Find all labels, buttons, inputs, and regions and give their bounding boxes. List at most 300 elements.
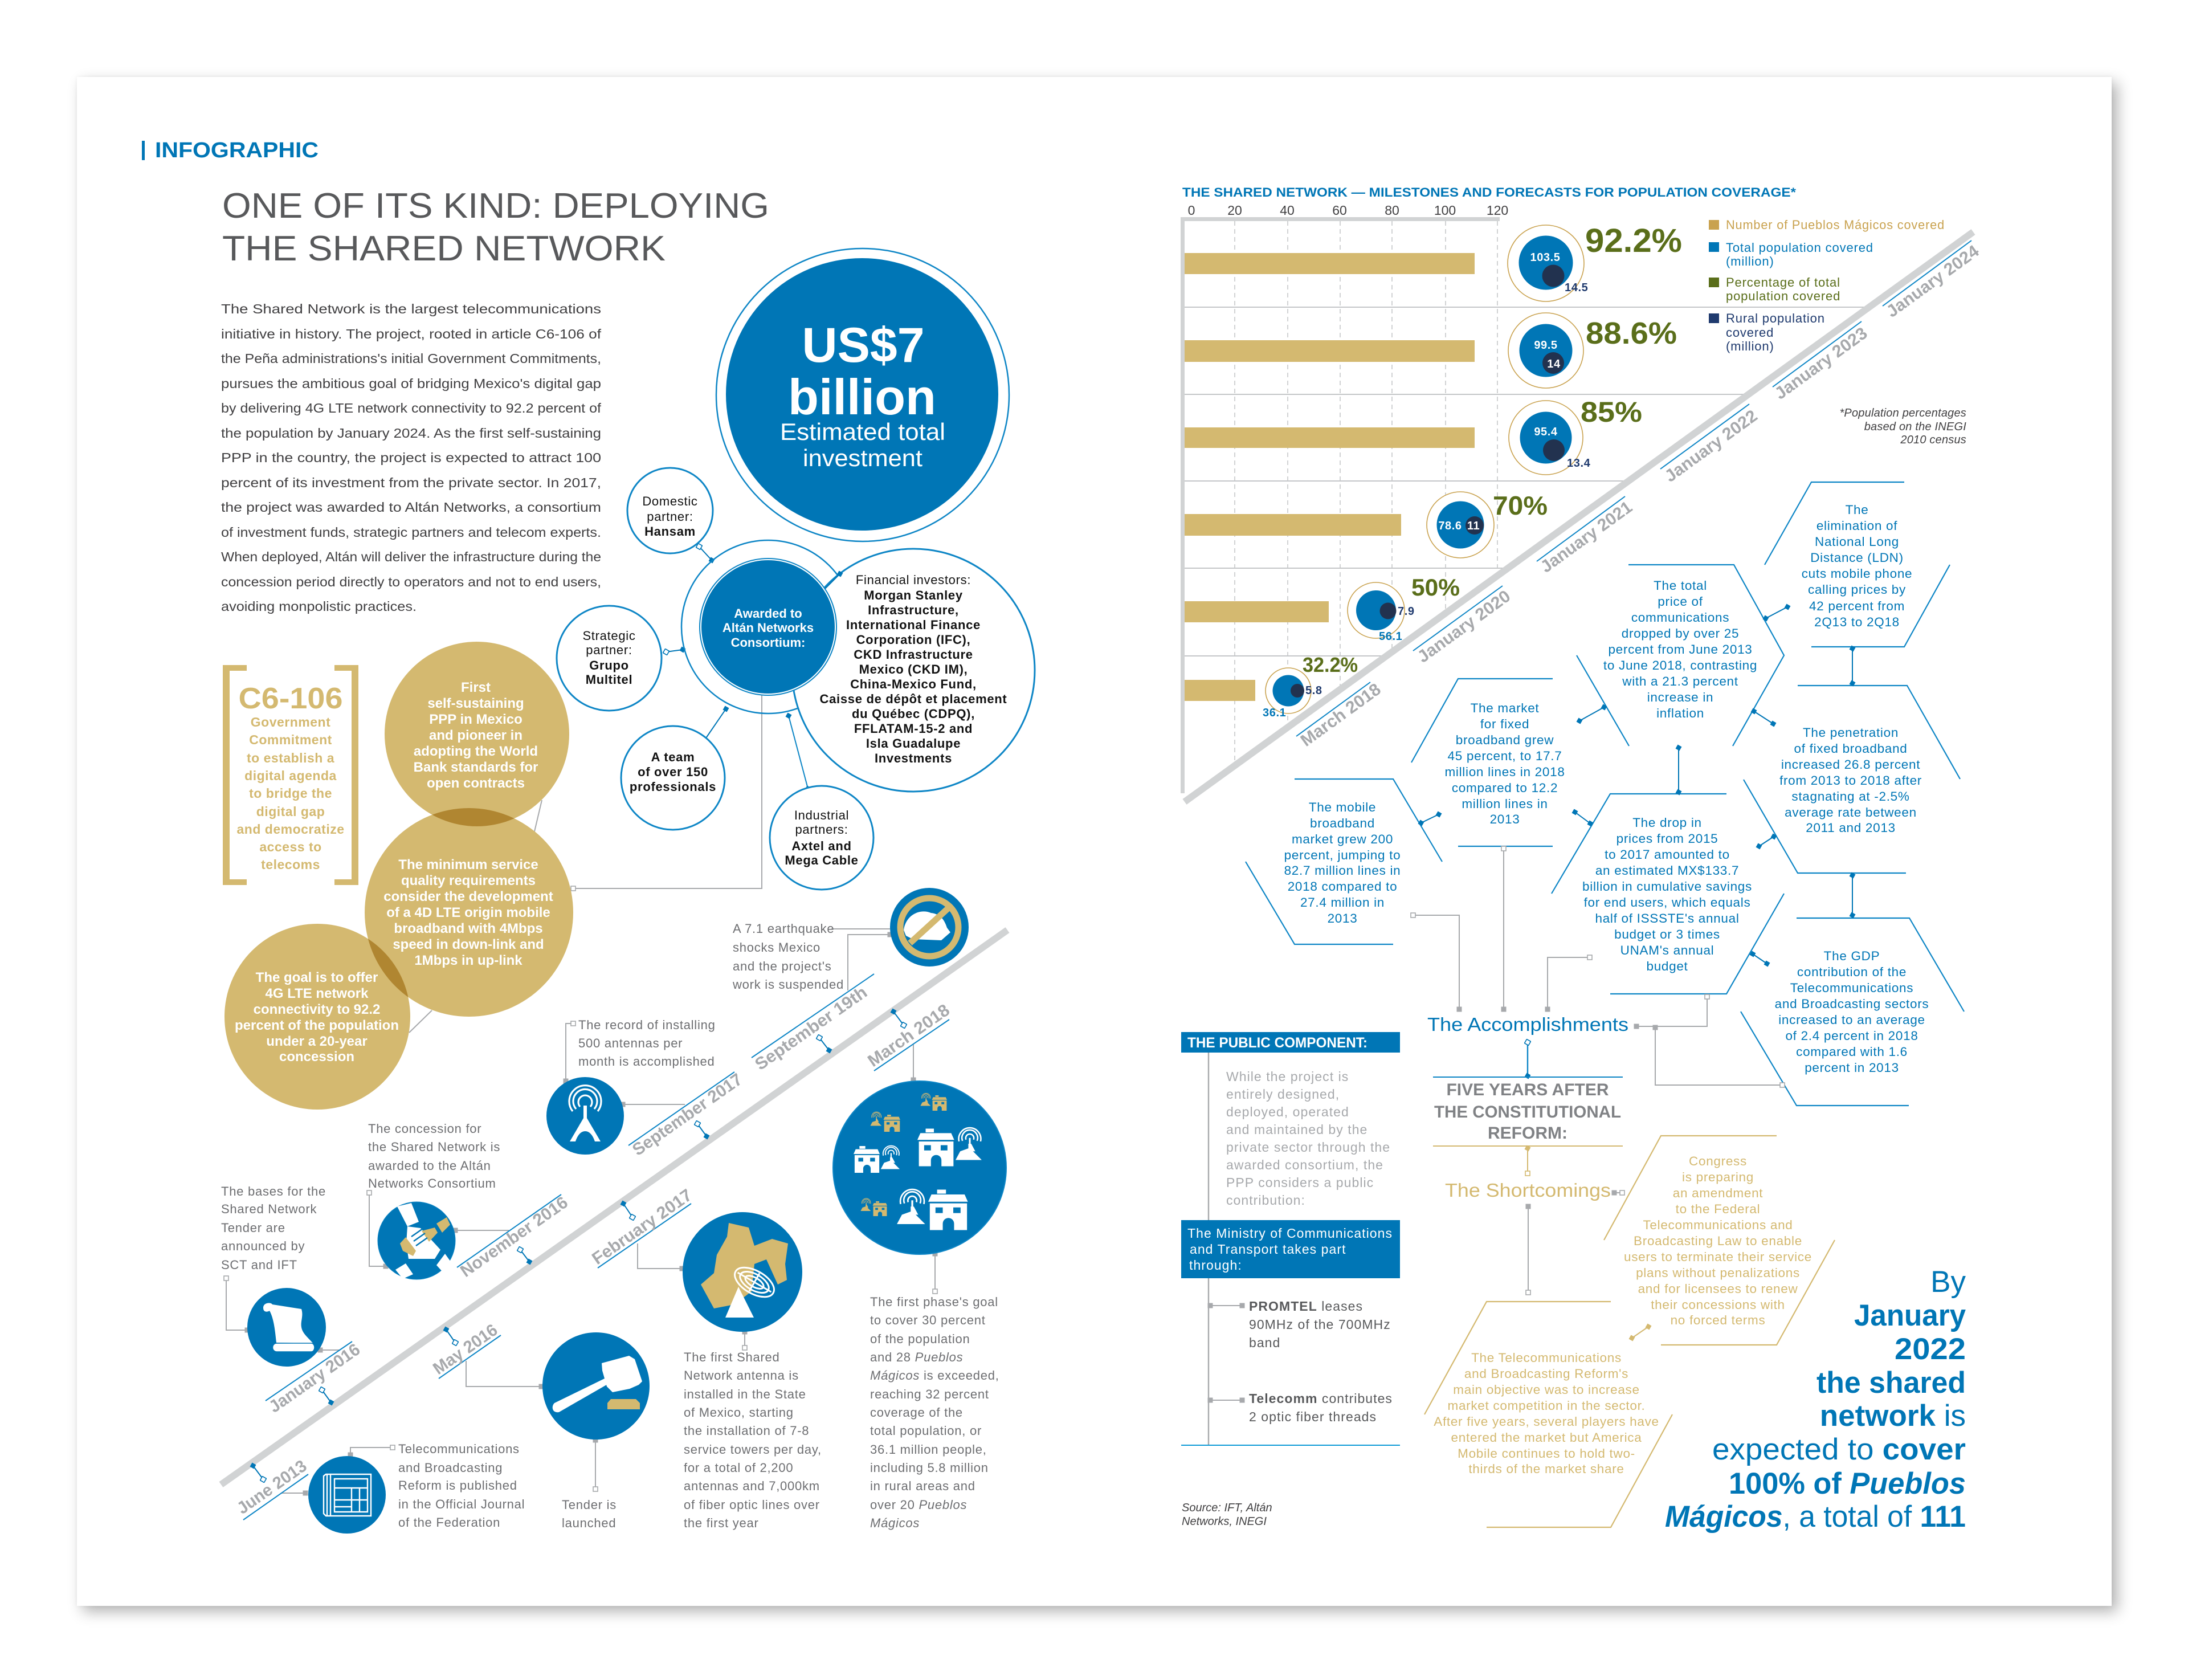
hexagon: reform objective: The Telecommunications (1471, 1351, 1622, 1365)
x axis labels: 80 (1385, 203, 1399, 218)
date label: June 2013: June 2013 (234, 1457, 311, 1518)
hexagon: mobile broadband market: 27.4 million in (1300, 895, 1385, 910)
hexagon: total price of communications: to June 2018, contrasting (1603, 658, 1757, 672)
hexagon: drop in prices: budget or 3 times (1614, 927, 1720, 941)
row separators (1185, 307, 1866, 656)
Telecomm text: Telecomm contributes (1249, 1391, 1393, 1406)
gold circle text: minimum service quality: of a 4D LTE origin mobile (386, 905, 550, 920)
milestone text: first antenna: antennas and 7,000km (684, 1479, 820, 1493)
closing statement: By (1930, 1265, 1966, 1299)
date label: January 2022: January 2022 (1662, 406, 1761, 486)
milestone text: first antenna: of Mexico, starting (684, 1405, 794, 1420)
closing statement: 2022 (1895, 1332, 1966, 1366)
callout: US$7 billion estimated total investment: billion (788, 369, 936, 425)
milestone text: first phase goal: and 28 Pueblos (870, 1350, 963, 1364)
bars: Pueblos Mágicos covered (1185, 253, 1475, 701)
gold circle text: minimum service quality: speed in down-link and (393, 937, 544, 952)
PROMTEL text: PROMTEL leases (1249, 1299, 1363, 1314)
milestone text: first phase goal: of the population (870, 1332, 970, 1346)
hexagon: Congress amendment: an amendment (1673, 1186, 1763, 1200)
C6-106 bracket callout: access to (259, 839, 322, 854)
circle: industrial partners: Industrial (794, 808, 849, 822)
milestone text: record antennas: 500 antennas per (578, 1036, 683, 1050)
hexagon: GDP contribution (1741, 918, 1964, 1106)
callout: US$7 billion estimated total investment: investment (803, 445, 922, 471)
title: THE SHARED NETWORK (222, 229, 666, 268)
gold circle text: minimum service quality: 1Mbps in up-link (414, 953, 522, 968)
bubble values: 11 (1467, 520, 1480, 532)
C6-106 bracket callout: Government (251, 715, 330, 729)
consortium disc: Awarded to Altán Networks (700, 558, 836, 695)
milestone text: reform published: of the Federation (398, 1515, 500, 1530)
hexagon: fixed broadband market: compared to 12.2 (1452, 781, 1558, 795)
gold circle text: first self-sustaining PPP: self-sustaining (427, 696, 524, 711)
date label: January 2021: January 2021 (1537, 498, 1636, 577)
hexagon: fixed broadband penetration (1744, 686, 1960, 873)
hexagon: fixed broadband penetration: stagnating at -2.5% (1791, 789, 1910, 804)
x axis labels: 120 (1487, 203, 1508, 218)
coverage percentages: 85% (1581, 396, 1642, 428)
milestone text: first phase goal: including 5.8 million (870, 1461, 989, 1475)
hexagon: fixed broadband market: million lines in (1462, 797, 1548, 811)
hexagon: GDP contribution: contribution of the (1797, 965, 1907, 979)
public contribution text: deployed, operated (1226, 1104, 1349, 1119)
bubble values: 78.6 (1438, 520, 1462, 532)
hexagon: GDP contribution: compared with 1.6 (1796, 1045, 1908, 1059)
hexagon: long distance elimination: The (1846, 503, 1868, 517)
hexagon: Congress amendment (1604, 1136, 1835, 1345)
Telecomm text: 2 optic fiber threads (1249, 1409, 1377, 1424)
hexagon: Congress amendment: Congress (1689, 1154, 1747, 1168)
milestone text: bases announced: Tender are (221, 1221, 285, 1235)
central block: five years after: REFORM: (1488, 1124, 1567, 1143)
date label: September 2017: September 2017 (629, 1070, 746, 1160)
circle: domestic partner: Domestic (642, 494, 698, 508)
C6-106 bracket callout: telecoms (261, 857, 320, 872)
header bar (1181, 1032, 1400, 1053)
hexagon: long distance elimination: 42 percent from (1809, 599, 1905, 613)
milestone text: reform published: in the Official Journal (398, 1497, 525, 1511)
bubble values: 103.5 (1530, 251, 1561, 264)
source note: Source: IFT, Altán (1182, 1502, 1272, 1514)
hexagon: drop in prices: The drop in (1632, 815, 1702, 830)
connector lines of consortium diagram (573, 547, 808, 888)
milestone text: bases announced: Shared Network (221, 1202, 317, 1216)
date label: February 2017: February 2017 (589, 1186, 696, 1269)
footnote: 2010 census (1900, 434, 1966, 446)
gold circle text: the goal: The goal is to offer (256, 970, 378, 985)
hexagon: mobile broadband market (1246, 779, 1442, 944)
hexagon: reform objective: entered the market but America (1451, 1430, 1642, 1445)
milestone text: first phase goal: over 20 Pueblos (870, 1498, 967, 1512)
hexagon: mobile broadband market: percent, jumping to (1284, 848, 1401, 862)
hexagon: total price of communications: percent from June 2013 (1608, 642, 1753, 656)
timeline axis: right page (1185, 232, 1973, 802)
gold circle text: the goal: 4G LTE network (266, 986, 369, 1001)
hexagon: mobile broadband market: 2013 (1328, 911, 1357, 925)
legend: Percentage of total (1726, 275, 1840, 289)
hexagon: Congress amendment: Telecommunications and (1643, 1218, 1793, 1232)
circle: financial investors: Caisse de dépôt et placement (820, 692, 1007, 706)
hexagon: drop in prices: to 2017 amounted to (1605, 847, 1730, 862)
C6-106 bracket callout: digital agenda (244, 768, 337, 783)
C6-106 bracket callout: to establish a (247, 751, 334, 765)
milestone text: first antenna: Network antenna is (684, 1368, 799, 1383)
intro text block: the Peña administrations's initial Government Commitments, (221, 351, 601, 366)
hexagon: fixed broadband penetration: of fixed broadband (1794, 741, 1908, 756)
rural population bubbles (1291, 264, 1565, 698)
ministry box: through: (1189, 1258, 1242, 1273)
intro text block: the project was awarded to Altán Networks, a consortium (221, 500, 601, 515)
timeline axis: left page (221, 930, 1007, 1485)
date label: September 19th: September 19th (752, 983, 871, 1074)
intro text block: the population by January 2024. As the first self-sustaining (221, 426, 601, 441)
circle: team of professionals: A team (651, 750, 695, 764)
bubble values (1263, 251, 1591, 719)
ministry box (1181, 1220, 1400, 1278)
hexagon: GDP contribution: increased to an average (1778, 1013, 1925, 1027)
closing statement: Mágicos, a total of 111 (1665, 1500, 1966, 1534)
bubble values: 5.8 (1305, 684, 1322, 697)
icon: joined hands (378, 1202, 455, 1279)
circle: strategic partner: Strategic (582, 629, 636, 643)
x axis labels: 20 (1227, 203, 1242, 218)
legend: Total population covered (1726, 240, 1873, 255)
consortium outer ring (681, 540, 855, 713)
milestone text: concession awarded: The concession for (368, 1122, 481, 1136)
hexagon: fixed broadband market: The market (1471, 701, 1539, 715)
circle: financial investors: Infrastructure, (868, 603, 959, 617)
C6-106 bracket callout: C6-106 (238, 682, 343, 715)
hexagon: GDP contribution: The GDP (1824, 949, 1880, 963)
circle: team of professionals: of over 150 (638, 765, 708, 779)
hexagon: reform objective: Mobile continues to hold two- (1458, 1446, 1635, 1461)
callout: US$7 billion estimated total investment: Estimated total (780, 418, 945, 445)
hexagon: drop in prices: billion in cumulative savings (1582, 879, 1752, 894)
x axis labels: 60 (1332, 203, 1347, 218)
milestone text: earthquake: shocks Mexico (733, 940, 820, 955)
hexagon: long distance elimination: elimination of (1816, 519, 1897, 533)
date label: November 2016: November 2016 (457, 1193, 572, 1281)
circle: financial investors: CKD Infrastructure (854, 647, 973, 662)
PROMTEL text: 90MHz of the 700MHz (1249, 1317, 1391, 1332)
C6-106 bracket callout: Commitment (249, 732, 332, 747)
bubble values: 56.1 (1379, 630, 1402, 643)
milestone text: earthquake: work is suspended (732, 977, 844, 992)
bubble values: 95.4 (1534, 426, 1558, 438)
hexagon: reform objective: After five years, several players have (1434, 1414, 1659, 1429)
C6-106 bracket callout: and democratize (237, 822, 344, 837)
axes (1181, 217, 1500, 793)
legend: covered (1726, 325, 1774, 340)
source note: Networks, INEGI (1182, 1515, 1267, 1528)
milestone text: first phase goal: Mágicos (870, 1516, 920, 1530)
hexagon: total price of communications (1577, 565, 1784, 746)
milestone text: concession awarded: awarded to the Altán (368, 1159, 491, 1173)
consortium disc: Awarded to Altán Networks: Consortium: (731, 635, 805, 650)
coverage percentages: 88.6% (1586, 316, 1677, 350)
consortium disc: Awarded to Altán Networks: Awarded to (734, 606, 802, 621)
closing statement: expected to cover (1712, 1433, 1966, 1466)
milestone text: earthquake: and the project's (733, 959, 832, 973)
circle: financial investors: du Québec (CDPQ), (852, 707, 975, 721)
panel: the public component (1181, 1032, 1400, 1445)
circle: financial investors: Investments (875, 751, 952, 765)
hexagon: GDP contribution: of 2.4 percent in 2018 (1785, 1029, 1918, 1043)
hexagon: drop in prices: half of ISSSTE's annual (1595, 911, 1740, 925)
central block: five years after (1433, 1042, 1623, 1173)
public contribution text: private sector through the (1226, 1140, 1390, 1155)
bubble values: 13.4 (1567, 457, 1591, 470)
public contribution text: While the project is (1226, 1069, 1349, 1084)
circle: financial investors (792, 549, 1035, 792)
circle: financial investors: International Finance (846, 618, 981, 632)
legend: (million) (1726, 254, 1774, 268)
intro text block (221, 301, 602, 614)
circle: strategic partner (557, 606, 662, 711)
bubble values: 7.9 (1398, 605, 1415, 618)
milestone text: first antenna: the installation of 7-8 (684, 1424, 809, 1438)
intro text block: concession period directly to operators and not to end users, (221, 574, 601, 589)
hexagon: Congress amendment: users to terminate their service (1624, 1250, 1812, 1264)
hexagon: fixed broadband market: for fixed (1480, 717, 1529, 731)
gold circle text: the goal: concession (279, 1049, 354, 1065)
hexagon: drop in prices: budget (1646, 959, 1688, 973)
milestone text: first antenna: for a total of 2,200 (684, 1461, 793, 1475)
circle: financial investors: China-Mexico Fund, (850, 677, 977, 691)
gold circle text: the goal: percent of the population (235, 1018, 399, 1033)
gold circle text: first self-sustaining PPP: Bank standards for (414, 760, 538, 775)
hexagon: drop in prices (1552, 794, 1784, 994)
circle: financial investors: FFLATAM-15-2 and (854, 721, 973, 736)
hexagon connectors (1421, 607, 1852, 964)
central block: five years after: THE CONSTITUTIONAL (1434, 1103, 1621, 1122)
circle: domestic partner: Hansam (644, 524, 696, 539)
legend: population covered (1726, 289, 1840, 303)
PROMTEL text: band (1249, 1335, 1280, 1350)
milestone text: first antenna: the first year (684, 1516, 759, 1530)
coverage percentages (1303, 222, 1682, 676)
ministry box: The Ministry of Communications (1187, 1226, 1393, 1241)
closing statement: January (1854, 1299, 1966, 1332)
public contribution text: PPP considers a public (1226, 1175, 1374, 1190)
hexagon: total price of communications: The total (1654, 578, 1707, 593)
gold connector (1632, 1327, 1648, 1338)
intro text block: PPP in the country, the project is expected to attract 100 (221, 450, 601, 465)
hexagon: drop in prices: an estimated MX$133.7 (1595, 863, 1739, 878)
footnote: based on the INEGI (1864, 421, 1966, 433)
hexagon: Congress amendment: plans without penalizations (1636, 1266, 1800, 1280)
bubble values: 99.5 (1534, 339, 1558, 352)
gold circle text: minimum service quality: consider the development (383, 889, 553, 904)
hexagon: fixed broadband penetration: 2011 and 2013 (1806, 821, 1896, 835)
icon: gavel (542, 1332, 650, 1440)
hexagon: fixed broadband market: 2013 (1490, 812, 1520, 826)
hexagon: reform objective: thirds of the market share (1468, 1462, 1624, 1476)
milestone text: first phase goal: to cover 30 percent (870, 1313, 986, 1327)
hexagon: Congress amendment: is preparing (1682, 1170, 1754, 1184)
icon: earthquake suspended (890, 888, 969, 967)
circle: financial investors: Morgan Stanley (864, 588, 963, 602)
hexagon: fixed broadband market: 45 percent, to 17.7 (1448, 749, 1562, 763)
x axis labels: 40 (1280, 203, 1295, 218)
legend: Rural population (1726, 311, 1825, 325)
circle: strategic partner: Multitel (586, 672, 632, 687)
hexagon: GDP contribution: percent in 2013 (1805, 1061, 1899, 1075)
circle: strategic partner: partner: (586, 643, 632, 657)
hexagon: long distance elimination: 2Q13 to 2Q18 (1814, 615, 1900, 629)
gray connectors to accomplishments (1413, 849, 1782, 1292)
milestone text: bases announced: The bases for the (221, 1184, 326, 1198)
C6-106 bracket callout (223, 665, 358, 885)
circle: team of professionals (621, 726, 725, 830)
milestone text: reform published: and Broadcasting (398, 1461, 503, 1475)
timeline ticks (253, 1012, 904, 1479)
closing statement: the shared (1816, 1366, 1966, 1400)
bubble values: 14.5 (1565, 282, 1588, 294)
milestone text: tender launched: Tender is (562, 1498, 617, 1512)
milestone text: bases announced: announced by (221, 1239, 305, 1253)
gold circle text: first self-sustaining PPP: open contracts (427, 776, 525, 791)
intro text block: When deployed, Altán will deliver the infrastructure during the (221, 549, 601, 564)
coverage percentages: 50% (1411, 574, 1460, 601)
closing statement (1665, 1265, 1966, 1534)
x axis labels: 100 (1434, 203, 1456, 218)
consortium disc: Awarded to Altán Networks: Altán Networks (722, 621, 814, 635)
circle: industrial partners: partners: (795, 822, 848, 837)
milestone text: earthquake: A 7.1 earthquake (733, 921, 834, 936)
date label: January 2023: January 2023 (1771, 324, 1871, 403)
hexagon: drop in prices: for end users, which equals (1584, 895, 1750, 910)
milestone text: reform published: Reform is published (398, 1478, 517, 1493)
hexagon: fixed broadband penetration: average rate between (1785, 805, 1917, 819)
chart: coverage bars, axes and bubbles (1181, 203, 1866, 793)
coverage percentages: 70% (1493, 491, 1548, 520)
hexagon: Congress amendment: their concessions with (1651, 1298, 1785, 1312)
hexagon: total price of communications: dropped by over 25 (1622, 626, 1739, 641)
milestone text: bases announced: SCT and IFT (221, 1258, 297, 1272)
hexagon: total price of communications: price of (1658, 594, 1703, 609)
intro text block: by delivering 4G LTE network connectivity to 92.2 percent of (221, 401, 602, 415)
total population bubbles (1273, 236, 1573, 707)
icon: towns with antennas (833, 1081, 1006, 1254)
bubble values: 36.1 (1263, 707, 1286, 719)
icon: scroll (247, 1288, 326, 1367)
date label: January 2020: January 2020 (1414, 587, 1514, 667)
milestone text: reform published: Telecommunications (398, 1442, 520, 1456)
milestone text: first antenna: service towers per day, (684, 1442, 822, 1457)
hexagon: total price of communications: with a 21.3 percent (1622, 674, 1738, 688)
central block: five years after: FIVE YEARS AFTER (1446, 1080, 1609, 1099)
public contribution text: contribution: (1226, 1193, 1305, 1208)
hexagon: fixed broadband penetration: increased 26.8 percent (1781, 757, 1920, 772)
date label: March 2018: March 2018 (864, 1001, 953, 1071)
intro text block: The Shared Network is the largest telecommunications (221, 301, 601, 316)
milestone text: first antenna: installed in the State (684, 1387, 806, 1401)
milestone text: first phase goal: in rural areas and (870, 1479, 975, 1493)
icon: antenna (546, 1077, 624, 1155)
gold circle text: the goal: under a 20-year (266, 1034, 368, 1049)
heading: The Shortcomings: The Shortcomings (1445, 1180, 1611, 1201)
ministry box: and Transport takes part (1190, 1242, 1346, 1257)
circle: industrial partners: Axtel and (791, 839, 852, 853)
timeline connectors (226, 929, 935, 1493)
section tag: INFOGRAPHIC: INFOGRAPHIC (155, 138, 319, 162)
milestone text: first phase goal: coverage of the (870, 1405, 963, 1420)
intro text block: percent of its investment from the private sector. In 2017, (221, 475, 601, 490)
circle: industrial partners (770, 786, 873, 890)
hexagon: drop in prices: UNAM's annual (1620, 943, 1714, 957)
hexagon: mobile broadband market: broadband (1310, 816, 1375, 830)
gold circle text: first self-sustaining PPP: and pioneer in (429, 728, 522, 743)
circle: domestic partner: partner: (647, 509, 693, 524)
hexagon: mobile broadband market: market grew 200 (1292, 832, 1393, 846)
branch lines (1210, 1306, 1242, 1400)
overlapping gold circles (224, 642, 573, 1110)
heading: The Accomplishments: The Accomplishments (1427, 1014, 1628, 1035)
milestone text: first phase goal: 36.1 million people, (870, 1442, 987, 1457)
circle: industrial partners: Mega Cable (785, 853, 859, 867)
hexagon: total price of communications: increase in (1647, 690, 1713, 704)
milestone text: first antenna: of fiber optic lines over (684, 1498, 820, 1512)
gold circle text: minimum service quality: quality requirements (401, 873, 536, 888)
gold circle text: minimum service quality: The minimum service (398, 857, 538, 872)
circle: financial investors: Isla Guadalupe (866, 736, 961, 751)
milestone text: concession awarded: Networks Consortium (368, 1176, 496, 1190)
intro text block: avoiding monpolistic practices. (221, 599, 417, 614)
hexagon: fixed broadband penetration: The penetration (1803, 725, 1899, 740)
legend: Number of Pueblos Mágicos covered (1726, 218, 1945, 232)
hexagon: drop in prices: prices from 2015 (1616, 831, 1718, 846)
milestone text: first phase goal: total population, or (870, 1424, 982, 1438)
milestone text: first phase goal: reaching 32 percent (870, 1387, 989, 1401)
public contribution text: and maintained by the (1226, 1122, 1368, 1137)
hexagon: long distance elimination: calling prices by (1808, 582, 1906, 597)
hexagon: fixed broadband market: million lines in 2018 (1444, 765, 1565, 779)
hexagon: long distance elimination: Distance (LDN) (1810, 551, 1904, 565)
gold circle text: first self-sustaining PPP: PPP in Mexico (429, 712, 522, 727)
legend: (million) (1726, 339, 1774, 353)
date label: March 2018 (chart): March 2018 (1297, 680, 1385, 751)
coverage percentages: 92.2% (1585, 222, 1682, 259)
milestone text: first phase goal: The first phase's goal (870, 1295, 998, 1309)
hexagon: Congress amendment: Broadcasting Law to enable (1634, 1234, 1802, 1248)
gold circle text: the goal: connectivity to 92.2 (254, 1002, 380, 1017)
date label: May 2016: May 2016 (430, 1320, 501, 1379)
public contribution text: awarded consortium, the (1226, 1157, 1383, 1172)
closing statement: 100% of Pueblos (1729, 1467, 1966, 1500)
header bar: THE PUBLIC COMPONENT: (1187, 1035, 1368, 1051)
bubble rings (1266, 225, 1584, 713)
milestone text: tender launched: launched (562, 1516, 616, 1530)
milestone text: record antennas: month is accomplished (578, 1054, 715, 1069)
callout: US$7 billion estimated total investment: US$7 (802, 318, 924, 373)
hexagon: Congress amendment: to the Federal (1676, 1202, 1760, 1216)
milestone text: record antennas: The record of installing (578, 1018, 716, 1032)
title: ONE OF ITS KIND: DEPLOYING (222, 186, 769, 226)
legend (1709, 218, 1945, 353)
intro text block: initiative in history. The project, rooted in article C6-106 of (221, 327, 602, 341)
x axis labels: 0 (1188, 203, 1195, 218)
hexagon: reform objective: market competition in the sector. (1447, 1398, 1646, 1413)
hexagon: reform objective: main objective was to increase (1453, 1383, 1640, 1397)
icon: newspaper (308, 1456, 386, 1534)
hexagon: total price of communications: communications (1631, 610, 1729, 625)
gold circle text: minimum service quality: broadband with 4Mbps (394, 921, 543, 936)
closing statement: network is (1820, 1399, 1966, 1433)
hexagon: GDP contribution: Telecommunications (1790, 981, 1913, 995)
hexagon: Congress amendment: no forced terms (1671, 1313, 1765, 1327)
